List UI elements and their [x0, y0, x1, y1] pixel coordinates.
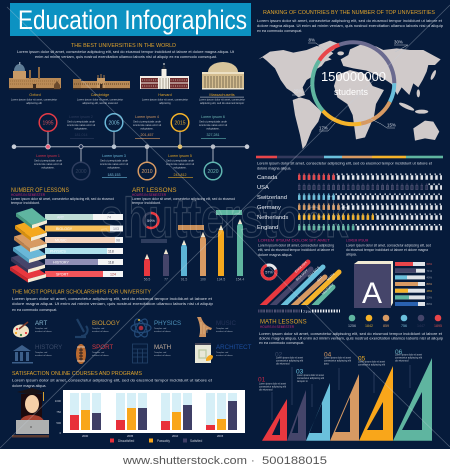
bar chart: lessons: PHYSICS	[50, 250, 66, 254]
bar chart: lessons: 103	[113, 227, 119, 231]
milestone: 2000: 2000	[75, 169, 87, 175]
percent callouts: 30%	[394, 40, 403, 44]
milestone: 2010	[133, 115, 161, 180]
text block: Massachusetts	[199, 93, 245, 105]
milestone: 2000: omnis iste natus error sit	[67, 123, 95, 127]
step descriptions: do eiusmod	[395, 358, 409, 362]
text block: satisfaction intro	[12, 378, 212, 388]
icon: temple	[12, 345, 33, 364]
progress dots: 71%	[303, 309, 311, 314]
label: physics: PHYSICS	[154, 320, 181, 327]
legend: Dissatisfied	[118, 439, 135, 443]
text block: book intro	[346, 238, 431, 256]
text block: Massachusetts: Massachusetts	[209, 93, 235, 97]
icon: football	[76, 344, 86, 364]
pencil chart: 77	[164, 278, 168, 282]
bar chart: satisfaction	[55, 390, 245, 443]
text block: art intro: tempor incididunt.	[132, 201, 161, 205]
coloured value dots: 1447	[417, 324, 425, 328]
panel: book chart	[346, 238, 442, 328]
step descriptions: Lorem ipsum dolor sit amet	[358, 360, 385, 364]
bar chart: satisfaction: 2005	[127, 434, 134, 438]
bar chart: lessons: 74	[107, 216, 111, 220]
bar chart: satisfaction: 2010	[172, 434, 179, 438]
text block: diagonal intro: elit, sed do eiusmod tempor incididunt ut labore et	[258, 248, 334, 252]
text block: art intro: Lorem ipsum dolor sit amet, consectetur adipiscing elit, sed do eiusmod	[132, 197, 235, 201]
stacked bars: 71%	[426, 269, 433, 273]
milestone: 2000: voluptatem.	[74, 126, 88, 130]
milestone: 2010: Lorem ipsum 4	[135, 115, 159, 119]
text block: strip caption: Lorem ipsum dolor sit amet, consectetur adipiscing elit, sed do eiusmod tempor incididunt ut labore et	[257, 162, 432, 166]
country labels: England	[257, 225, 278, 231]
step labels: 06	[395, 349, 403, 356]
pencil chart: 91.5	[181, 278, 187, 282]
text block: Oxford: Oxford	[29, 93, 41, 97]
footer: site and image id: ·	[251, 455, 255, 467]
text block: Harvard	[142, 93, 188, 105]
text block: icon captions: incidunt ut labore	[154, 354, 171, 357]
coloured value dots: 1256	[348, 324, 356, 328]
text block: Massachusetts: adipiscing elit, sed do eiusmod tempor	[200, 101, 244, 105]
icon: architect	[195, 343, 213, 363]
icon: calculator	[132, 344, 148, 363]
text block: art intro: HOURS IN SEMESTER	[132, 193, 167, 197]
milestone: 2020: omnis iste natus error sit	[199, 123, 227, 127]
panel: math lessons	[258, 320, 443, 441]
step descriptions: Lorem ipsum dolor sit amet	[276, 356, 303, 360]
panel: best universities	[9, 43, 245, 105]
heading: math lessons: MATH LESSONS	[260, 320, 307, 326]
world map	[258, 41, 441, 149]
text block: Massachusetts: Lorem ipsum dolor sit amet, consectetur	[199, 98, 245, 102]
pictogram rows	[298, 174, 442, 228]
triangle 03	[306, 383, 330, 441]
label: art: ART	[35, 320, 47, 327]
milestone: 2015: 243,812	[174, 173, 186, 177]
bar chart: lessons: SPORT	[56, 272, 69, 276]
text block: lessons intro: tempor incididunt.	[11, 201, 40, 205]
coloured value dots: 859	[383, 324, 389, 328]
milestone: 2000: Sed ut perspiciatis unde	[67, 120, 95, 124]
title: Education Infographics	[18, 5, 247, 35]
icon: stack of books	[10, 208, 47, 282]
icon: microscope	[75, 319, 88, 337]
text block: scholarships intro: dolore magna aliqua. Ut enim ad minim veniam, quis nostrud exercitation ullamco laboris nisi ut aliquip	[12, 302, 213, 306]
step labels: 05	[358, 356, 366, 362]
percent callouts: 8%	[308, 38, 315, 42]
text block: math intro: HOURS IN SEMESTER	[260, 325, 295, 329]
pencil chart: 100	[200, 278, 206, 282]
step descriptions: consectetur adipiscing elit	[276, 358, 303, 362]
text block: Harvard: adipiscing	[159, 101, 171, 105]
heading: art lessons: ART LESSONS	[132, 187, 177, 194]
text block: scholarships intro	[12, 297, 213, 312]
triangle 04	[330, 374, 359, 441]
text block: icon captions: incidunt ut labore	[154, 330, 171, 333]
text block: Cambridge: Lorem ipsum dolor sit amet, consectetur	[77, 98, 123, 102]
label: music: MUSIC	[216, 320, 236, 327]
step descriptions: ipsu	[324, 362, 329, 366]
bar chart: lessons: 98	[116, 238, 120, 242]
ring label	[321, 69, 386, 97]
milestone: 1995: Lorem ipsum 1	[36, 154, 60, 158]
text block: strip caption: dolore magna aliqua.	[257, 166, 291, 170]
diagonal bar chart: ART	[316, 275, 324, 283]
text block: book intro: do eiusmod tempor incididunt ut labore et dolore magna	[346, 248, 429, 252]
icon: Massachusetts building	[202, 62, 244, 90]
text block: math intro	[259, 325, 443, 345]
text block: scholarships intro: Lorem ipsum dolor sit amet, consectetur adipiscing elit, sed do eiusmod tempor incididunt ut labore et	[12, 297, 212, 301]
step labels: 03	[296, 368, 304, 376]
milestone: 2015: omnis iste natus error sit	[166, 162, 194, 166]
diagonal bar chart	[250, 260, 345, 314]
text block: diagonal intro: dolore magna aliqua.	[258, 253, 292, 257]
text block: lessons intro	[11, 193, 114, 205]
bar chart: satisfaction: 2015	[217, 434, 224, 438]
milestone: 1995: omnis iste natus error sit	[34, 162, 62, 166]
bar chart: satisfaction: 500	[56, 421, 61, 425]
text block: Cambridge: Cambridge	[91, 93, 109, 97]
text block: icon captions: Templus sed	[154, 352, 167, 354]
heading: best universities: THE BEST UNIVERSITIES IN THE WORLD	[71, 43, 176, 49]
milestone: 2020	[199, 115, 227, 180]
text block: icon captions: incidunt ut labore	[35, 354, 52, 357]
milestone: 1995: Sed ut perspiciatis unde	[34, 158, 62, 162]
legend: Satisfied	[190, 439, 202, 443]
text block: Cambridge	[77, 93, 123, 105]
text block: icon captions: Templus sed	[154, 328, 167, 330]
label: math: MATH	[154, 344, 171, 351]
stacked bars: 60%	[426, 262, 433, 266]
percent callouts: 17%	[319, 126, 328, 130]
milestone: 2010: 201,457	[140, 133, 154, 137]
stacked bars: 50%	[426, 296, 433, 300]
milestone: 2005: Lorem ipsum 3	[102, 154, 126, 158]
text block: icon captions: incidunt ut labore	[92, 330, 109, 333]
country labels: Switzerland	[257, 195, 287, 201]
text block: universities intro: enim ad minim veniam, quis nostrud exercitation ullamco laboris nisi ut aliquip ex ea commodo consequat.	[35, 55, 217, 59]
triangle 05	[359, 366, 393, 441]
text block: ranking intro: dolore magna aliqua. Ut enim ad minim veniam, quis nostrud exercitation ullamco laboris nisi ut aliquip	[257, 24, 443, 28]
percent callouts	[292, 38, 408, 131]
milestone: 2000: Lorem ipsum 2	[69, 115, 93, 119]
diagonal bar chart: PHYSICS	[307, 265, 321, 279]
text block: icon captions: Templus sed	[92, 352, 105, 354]
text block: book intro: Lorem ipsum dolor sit amet, consectetur adipiscing elit, sed	[346, 244, 431, 248]
panel: art lessons	[132, 187, 244, 282]
text block: math intro: dolore magna aliqua. Ut enim ad minim veniam, quis nostrud exercitation ullamco laboris nisi ut aliquip	[259, 336, 443, 340]
step labels: 04	[324, 352, 332, 358]
text block: icon captions: incidunt ut labore	[216, 330, 233, 333]
label: sport: SPORT	[92, 344, 113, 351]
country labels: Canada	[257, 175, 278, 181]
step labels: 01	[258, 376, 266, 384]
text block: icon captions	[35, 328, 233, 357]
bar chart: lessons: 118	[108, 260, 114, 264]
milestone: 2005: voluptatem.	[107, 166, 121, 170]
step descriptions: Lorem ipsum dolor sit amet	[259, 382, 286, 386]
text block: strip caption	[257, 162, 432, 170]
icon: harp	[197, 317, 212, 337]
icon: book A: A	[362, 277, 382, 310]
bar chart: satisfaction: 2000	[82, 434, 89, 438]
stacked bars: 40%	[426, 276, 433, 280]
milestone: 2010: Sed ut perspiciatis unde	[133, 120, 161, 124]
legend: Passably	[157, 439, 170, 443]
pencil chart	[141, 210, 244, 282]
coloured value dots: 1842	[365, 324, 373, 328]
text block: ranking intro: ex ea commodo consequat.	[257, 29, 302, 33]
pencil chart: 154.4	[236, 278, 244, 282]
text block: math intro: ex ea commodo consequat.	[259, 341, 304, 345]
heading: satisfaction: SATISFACTION ONLINE COURSES AND PROGRAMS	[12, 371, 142, 377]
text block: icon captions: incidunt ut labore	[35, 330, 52, 333]
milestone: 2015: Sed ut perspiciatis unde	[166, 158, 194, 162]
milestone: 2020: Lorem ipsum 6	[201, 115, 225, 119]
bar chart: lessons: HISTORY	[53, 260, 69, 264]
step descriptions: consectetur adipiscing elit	[297, 376, 324, 380]
country labels: Germany	[257, 205, 281, 211]
footer: site and image id	[122, 455, 327, 467]
coloured value dots: 1895	[434, 324, 442, 328]
milestone: 2005: Sed ut perspiciatis unde	[100, 158, 128, 162]
stacked bars	[395, 262, 433, 306]
shutterstock watermark: shutterstock	[100, 186, 349, 249]
text block: math intro: Lorem ipsum dolor sit amet, consectetur adipiscing elit, sed do eiusmod tempor incididunt ut labore et	[259, 332, 442, 336]
percent callouts: 25%	[294, 88, 302, 94]
bar chart: lessons	[45, 214, 123, 277]
milestone: 1995	[34, 114, 62, 170]
panel: satisfaction	[12, 371, 245, 443]
text block: icon captions: incidunt ut labore	[92, 354, 109, 357]
stacked bars: 80%	[426, 282, 433, 286]
country labels: USA	[257, 185, 269, 191]
text block: icon captions: Templus sed	[35, 328, 48, 330]
stacked bars: 80%	[426, 302, 433, 306]
milestone: 2015: Lorem ipsum 5	[168, 154, 192, 158]
text block: Harvard: Lorem ipsum dolor sit amet, consectetur	[142, 98, 188, 102]
step descriptions: do eiusmod	[276, 362, 290, 366]
heading: scholarships: THE MOST POPULAR SCHOLARSHIPS FOR UNIVERSITY	[12, 290, 151, 296]
bar chart: lessons: ART	[57, 216, 65, 220]
footer: site and image id: 500188015	[262, 455, 327, 467]
pencil chart: 134.5	[217, 278, 225, 282]
bar chart: lessons: BIOLOGY	[56, 227, 73, 231]
milestone: 2005: omnis iste natus error sit	[100, 162, 128, 166]
timeline	[12, 114, 249, 180]
milestone: 2015	[166, 114, 194, 178]
milestone: 2015: voluptatem.	[173, 166, 187, 170]
triangle 06	[393, 358, 432, 441]
bar chart: satisfaction: 750	[56, 410, 61, 414]
step descriptions: consectetur adipiscing elit	[358, 362, 385, 366]
text block: scholarships intro: ex ea commodo consequat.	[12, 308, 57, 312]
triangle 02	[287, 390, 306, 441]
step descriptions: Lorem ipsum dolor sit amet	[324, 356, 351, 360]
footer: site and image id: www.shutterstock.com	[122, 455, 247, 467]
icon: Cambridge building	[73, 74, 130, 90]
percent callouts: 15%	[387, 122, 396, 128]
text block: Oxford	[11, 93, 57, 105]
text block: lessons intro: HOURS IN SEMESTER	[11, 193, 46, 197]
step labels: 02	[275, 352, 283, 358]
text block: icon captions: Templus sed	[216, 352, 229, 354]
icon: Harvard building	[140, 63, 189, 89]
legend	[110, 438, 202, 443]
coloured value dots	[348, 315, 442, 328]
triangle 01	[262, 399, 287, 441]
icon: Oxford building	[9, 62, 61, 90]
diagonal bar chart: ENGLISH	[294, 260, 308, 274]
diagonal bar chart: BIOLOGY	[295, 268, 309, 282]
heading: ranking: RANKING OF COUNTRIES BY THE NUMBER OF TOP UNIVERSITIES	[263, 10, 435, 16]
ring label: 150000000	[321, 69, 386, 84]
country labels: Netherlands	[257, 215, 288, 221]
milestone: 2020: voluptatem.	[206, 126, 220, 130]
milestone: 2005: 183,153	[108, 173, 120, 177]
text block: icon captions: Templus sed	[92, 328, 105, 330]
text block: book intro: LOREM IPSUM	[346, 238, 369, 242]
text block: icon captions: Templus sed	[35, 352, 48, 354]
milestone: 2020: Sed ut perspiciatis unde	[199, 120, 227, 124]
milestone: 2015: 2015	[174, 120, 186, 126]
diagonal bar chart: MATH	[326, 272, 336, 282]
stacked bars: 48%	[426, 289, 433, 293]
triangle chart	[262, 358, 432, 441]
milestone: 2005: 2005	[108, 120, 120, 126]
text block: ranking intro: Lorem ipsum dolor sit amet, consectetur adipiscing elit, sed do eiusmod tempor incididunt ut labore et	[257, 19, 442, 23]
step descriptions: consectetur adipiscing elit	[395, 356, 422, 360]
step descriptions	[259, 352, 422, 392]
step descriptions: Lorem ipsum dolor sit amet	[395, 352, 422, 356]
bar chart: lessons: 124	[110, 272, 116, 276]
milestone: 1995: voluptatem.	[41, 166, 55, 170]
text block: diagonal intro	[258, 238, 334, 257]
text block: diagonal intro: LOREM IPSUM DOLOR SIT AMET	[258, 238, 330, 242]
text block: satisfaction intro: dolore magna aliqua.	[12, 384, 46, 388]
bar chart: lessons: MUSIC	[55, 238, 67, 242]
text block: universities intro: Lorem ipsum dolor sit amet, consectetur adipiscing elit, sed do eiusmod tempor incididunt ut labore et dolore magna aliqua. Ut	[17, 50, 234, 54]
text block: satisfaction intro: Lorem ipsum dolor sit amet, consectetur adipiscing elit, sed do eiusmod tempor incididunt ut labore et	[12, 378, 212, 382]
icon: palette	[13, 322, 29, 338]
text block: universities intro	[17, 50, 234, 59]
panel: number of lessons	[10, 187, 123, 282]
text block: Oxford: adipiscing elit	[26, 101, 42, 105]
step descriptions: consectetur adipiscing elit	[259, 384, 286, 388]
milestone: 2010: omnis iste natus error sit	[133, 123, 161, 127]
coloured value dots: 756	[401, 324, 407, 328]
diagonal bar chart: HISTORY	[321, 282, 335, 296]
panel: scholarships	[12, 290, 252, 364]
heading: number of lessons: NUMBER OF LESSONS	[11, 187, 69, 194]
text block: diagonal intro: Lorem ipsum dolor sit amet, consectetur adipiscing	[258, 244, 334, 248]
milestone: 1995: 1995	[42, 120, 54, 126]
donut chart: 59%: 59%	[147, 218, 155, 223]
text block: icon captions: Templus sed	[216, 328, 229, 330]
milestone: 2010: voluptatem.	[140, 126, 154, 130]
text block: lessons intro: Lorem ipsum dolor sit amet, consectetur adipiscing elit, sed do eiusmod	[11, 197, 114, 201]
stacked strip	[256, 156, 443, 158]
panel: ranking of countries	[256, 10, 443, 231]
label: architect: ARCHITECT	[216, 344, 252, 351]
label: history: HISTORY	[35, 344, 62, 351]
label: biology: BIOLOGY	[92, 320, 120, 327]
icon: atom	[131, 317, 151, 339]
step descriptions: consectetur adipiscing elit	[324, 358, 351, 362]
milestone: 2000	[67, 115, 95, 180]
bar chart: lessons: 118	[108, 250, 114, 254]
icon: graduate with laptop	[12, 388, 49, 438]
milestone: 2005	[100, 114, 128, 178]
text block: Oxford: Lorem ipsum dolor sit amet, consectetur	[11, 98, 57, 102]
text block: art intro	[132, 193, 235, 205]
text block: book intro: aliqua.	[346, 252, 357, 256]
text block: icon captions: incidunt ut labore	[216, 354, 233, 357]
text block: Harvard: Harvard	[158, 93, 172, 97]
panel: diagonal bars	[250, 238, 345, 314]
pencil chart: 56.5	[144, 278, 150, 282]
milestone: 2020: 2020	[207, 169, 219, 175]
country labels	[257, 175, 288, 231]
text block: Cambridge: adipiscing elit, sed do eiusmod	[82, 101, 118, 105]
ring label: students	[334, 87, 369, 97]
step descriptions: tempor in	[297, 379, 308, 383]
milestone: 2000: 181,014	[74, 133, 88, 137]
bar chart: satisfaction: 1000	[55, 399, 61, 403]
donut ring: shares	[312, 42, 394, 124]
milestone: 2010: 2010	[141, 169, 153, 175]
text block: ranking intro	[257, 19, 443, 33]
milestone: 2020: 327,281	[206, 133, 220, 137]
donut chart: 57%: 57%	[265, 270, 273, 274]
step descriptions: Lorem ipsum dolor sit amet	[297, 373, 324, 377]
bar chart: satisfaction: 0	[59, 431, 61, 435]
step labels	[258, 349, 403, 384]
step descriptions: do eiusmod	[259, 388, 273, 392]
